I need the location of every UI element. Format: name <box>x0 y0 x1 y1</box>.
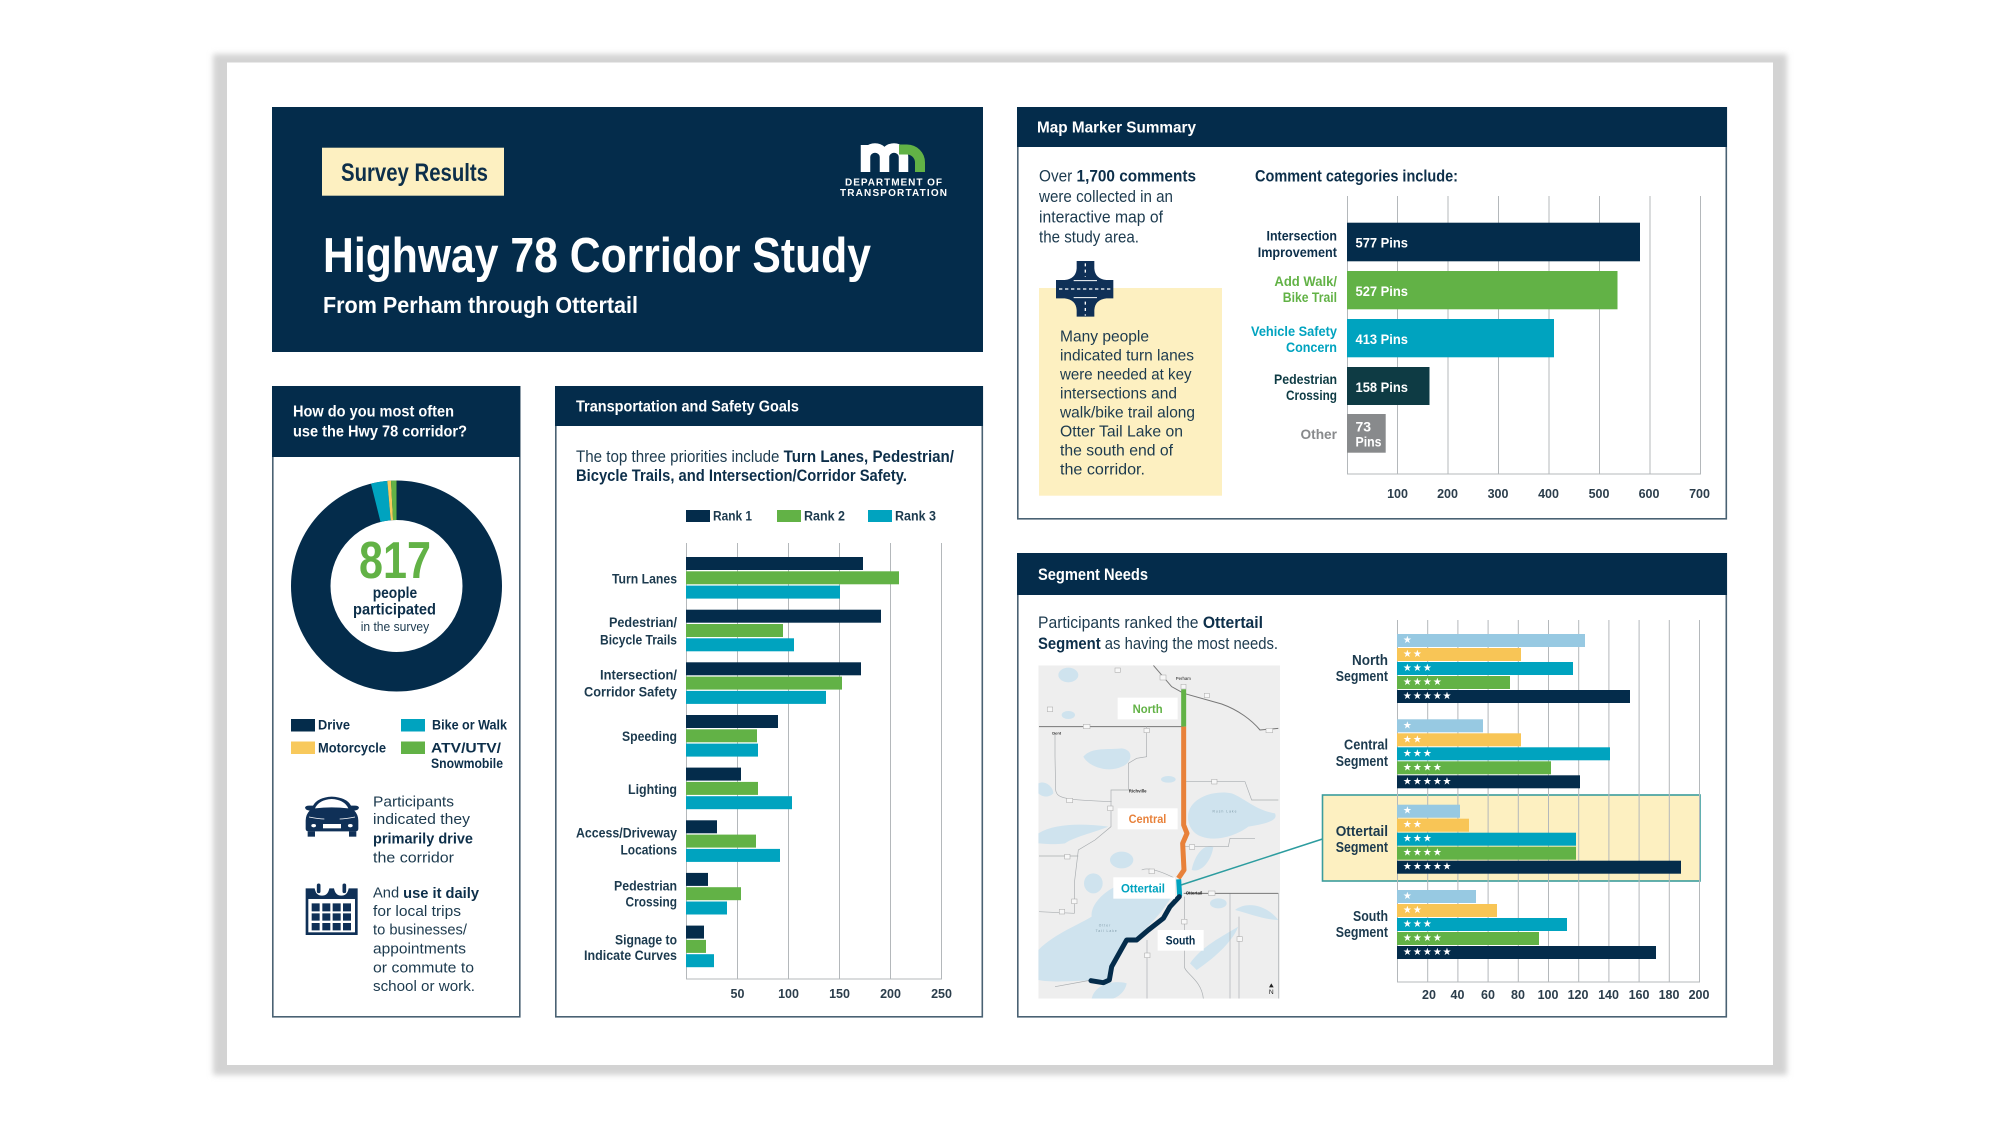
map labels: Rush Lake <box>1213 810 1237 814</box>
donut centre label: people <box>373 585 418 602</box>
intro text: the study area. <box>1039 229 1139 247</box>
panel: title banner <box>272 107 983 352</box>
text: use it daily: for local trips <box>373 903 461 920</box>
star ratings: ★★★ <box>1403 663 1432 674</box>
axis labels: 150 <box>829 987 850 1001</box>
star ratings: ★★ <box>1403 649 1422 660</box>
map labels <box>1052 676 1237 933</box>
intro text <box>1038 614 1278 653</box>
category labels: Crossing <box>626 894 677 910</box>
donut centre label <box>353 532 436 634</box>
star ratings: ★ <box>1403 891 1412 902</box>
chart legend <box>686 508 936 524</box>
panel heading: Segment Needs <box>1038 566 1148 584</box>
map labels: Ottertail <box>1186 890 1202 895</box>
callout text: indicated turn lanes <box>1060 348 1194 364</box>
callout text: the south end of <box>1060 442 1174 460</box>
segment labels <box>1336 653 1388 941</box>
category labels: Pedestrian/ <box>609 615 677 630</box>
bar chart: pins <box>1251 196 1710 501</box>
callout text: intersections and <box>1060 386 1177 402</box>
intro text: Segment as having the most needs. <box>1038 635 1278 653</box>
panel heading: Transportation and Safety Goals <box>576 398 799 416</box>
donut centre label: 817 <box>359 532 431 590</box>
star ratings: ★★★ <box>1403 834 1432 845</box>
chart legend: Rank 1 <box>713 508 752 524</box>
segment map labels <box>1113 698 1204 951</box>
category labels: Vehicle Safety <box>1251 323 1337 339</box>
axis labels: 140 <box>1598 988 1619 1002</box>
map labels: Otter <box>1099 924 1111 928</box>
panel: transportation and safety goals <box>555 386 983 1017</box>
category labels: Crossing <box>1286 387 1337 403</box>
star ratings: ★ <box>1403 720 1412 731</box>
text: use it daily: to businesses/ <box>373 922 468 938</box>
text: primarily drive: the corridor <box>373 850 454 866</box>
text: primarily drive: Participants <box>373 794 454 810</box>
MnDOT logo: DEPARTMENT OF <box>845 178 942 188</box>
category labels: Bike Trail <box>1283 289 1337 305</box>
chart legend: Rank 3 <box>895 508 936 524</box>
panel heading: use the Hwy 78 corridor? <box>293 424 467 440</box>
axis labels: 60 <box>1481 988 1495 1002</box>
bar values <box>1356 235 1408 449</box>
star ratings: ★★★★ <box>1403 933 1442 944</box>
star ratings: ★★★★★ <box>1403 862 1452 873</box>
category labels: Bicycle Trails <box>600 632 677 648</box>
panel: map marker summary <box>1017 107 1727 519</box>
panel: segment needs <box>1017 553 1727 1017</box>
donut chart <box>311 480 482 672</box>
segment map labels: North <box>1133 702 1163 716</box>
star ratings: ★★ <box>1403 820 1422 831</box>
callout text: the corridor. <box>1060 462 1145 478</box>
axis labels: 200 <box>880 987 901 1001</box>
intro text: Participants ranked the Ottertail <box>1038 614 1263 632</box>
segment labels: South <box>1353 909 1388 925</box>
category labels: Access/Driveway <box>576 826 677 840</box>
axis labels: 40 <box>1451 988 1464 1002</box>
corridor route segments <box>1091 689 1187 983</box>
panel heading: Map Marker Summary <box>1037 120 1196 136</box>
survey results badge: Survey Results <box>341 159 488 187</box>
star ratings: ★★★ <box>1403 748 1432 759</box>
axis labels: 200 <box>1437 487 1458 501</box>
corridor map <box>1038 665 1280 999</box>
axis labels: 100 <box>1538 988 1558 1002</box>
callout: turn lanes <box>1039 261 1222 496</box>
category labels: Turn Lanes <box>612 572 677 586</box>
bar values: 413 Pins <box>1356 331 1408 347</box>
text: use it daily: or commute to <box>373 960 474 976</box>
category labels: Concern <box>1286 339 1337 355</box>
donut legend: ATV/UTV/ <box>431 740 501 756</box>
map labels: Tail Lake <box>1096 929 1118 933</box>
donut centre label: participated <box>353 602 436 618</box>
bar values: 158 Pins <box>1356 379 1408 395</box>
text: use it daily: appointments <box>373 940 466 958</box>
category labels: Corridor Safety <box>584 684 677 700</box>
star ratings: ★★★★ <box>1403 848 1442 859</box>
donut centre label: in the survey <box>361 620 430 634</box>
panel heading: How do you most often <box>293 404 454 420</box>
category labels: Intersection <box>1266 228 1337 244</box>
map labels: Richville <box>1129 788 1147 793</box>
axis labels: 600 <box>1639 487 1659 501</box>
star ratings: ★★★★★ <box>1403 947 1452 958</box>
chart legend: Rank 2 <box>804 508 845 524</box>
segment map labels: Ottertail <box>1121 881 1165 895</box>
intro text: interactive map of <box>1039 209 1163 227</box>
north arrow <box>1269 983 1274 996</box>
star ratings: ★ <box>1403 806 1412 817</box>
icon: calendar <box>306 883 358 935</box>
bar chart: segment rankings <box>1336 620 1709 1002</box>
intro text <box>576 448 954 485</box>
donut legend: Snowmobile <box>431 756 503 771</box>
title: Highway 78 Corridor Study <box>323 229 871 283</box>
star ratings <box>1403 635 1452 958</box>
segment labels: Segment <box>1336 840 1388 856</box>
axis labels: 20 <box>1422 988 1436 1002</box>
highlight: Ottertail segment <box>1181 795 1700 885</box>
intro text: Bicycle Trails, and Intersection/Corridor Safety. <box>576 467 907 485</box>
segment map labels: South <box>1166 934 1195 948</box>
category labels: Intersection/ <box>600 668 677 682</box>
category labels <box>576 572 677 963</box>
text: use it daily <box>373 884 480 995</box>
category labels: Pedestrian <box>1274 371 1337 387</box>
star ratings: ★★ <box>1403 905 1422 916</box>
segment labels: Ottertail <box>1336 824 1388 840</box>
donut legend: Bike or Walk <box>432 718 507 732</box>
axis labels: 100 <box>1387 487 1408 501</box>
star ratings: ★★★ <box>1403 919 1432 930</box>
segment labels: Central <box>1344 738 1388 754</box>
category labels: Signage to <box>615 932 677 948</box>
bar values: 577 Pins <box>1356 235 1408 251</box>
axis labels: 700 <box>1689 487 1710 501</box>
text: use it daily: And use it daily <box>373 884 480 902</box>
axis labels: 500 <box>1589 487 1609 501</box>
intro text <box>1038 168 1196 247</box>
category labels: Indicate Curves <box>584 948 677 963</box>
callout text: Otter Tail Lake on <box>1060 424 1183 440</box>
axis labels: 120 <box>1568 988 1588 1002</box>
donut legend: Drive <box>318 718 350 732</box>
axis labels: 100 <box>778 987 799 1001</box>
segment labels: Segment <box>1336 754 1388 770</box>
segment map labels: Central <box>1129 812 1166 826</box>
segment labels: North <box>1352 653 1388 669</box>
text: primarily drive <box>373 794 473 866</box>
chart heading: Comment categories include: <box>1255 168 1458 186</box>
MnDOT logo <box>840 145 947 199</box>
survey results badge <box>322 148 504 196</box>
north arrow: N <box>1269 989 1274 996</box>
axis labels: 180 <box>1659 988 1679 1002</box>
category labels: Pedestrian <box>614 878 677 894</box>
category labels: Locations <box>620 842 677 858</box>
category labels: Lighting <box>628 782 677 797</box>
bar values: Pins <box>1356 433 1382 449</box>
callout text: Many people <box>1060 328 1149 346</box>
donut legend <box>291 718 507 771</box>
bar chart: priorities <box>576 543 952 1001</box>
map labels: Perham <box>1176 676 1191 681</box>
bar values: 73 <box>1356 419 1371 435</box>
axis labels: 50 <box>731 987 744 1001</box>
map labels: Dent <box>1052 730 1062 735</box>
star ratings: ★★ <box>1403 734 1422 745</box>
poster card <box>227 62 1773 1065</box>
icon: intersection <box>1056 261 1113 317</box>
callout text <box>1059 328 1195 478</box>
subtitle: From Perham through Ottertail <box>323 292 638 318</box>
donut legend: Motorcycle <box>318 740 386 756</box>
category labels: Other <box>1300 426 1338 442</box>
bar values: 527 Pins <box>1356 283 1408 299</box>
category labels <box>1251 228 1338 442</box>
segment labels: Segment <box>1336 669 1388 685</box>
axis labels <box>1422 988 1709 1002</box>
star ratings: ★★★★★ <box>1403 776 1452 787</box>
intro text: were collected in an <box>1038 188 1173 206</box>
poster shadow frame <box>213 54 1787 1075</box>
panel: how do you use the corridor <box>272 386 520 1017</box>
axis labels: 80 <box>1511 988 1525 1002</box>
axis labels: 160 <box>1629 988 1649 1002</box>
text: primarily drive: indicated they <box>373 811 471 828</box>
category labels: Improvement <box>1258 244 1337 260</box>
axis labels: 300 <box>1488 487 1508 501</box>
icon: car <box>305 797 359 837</box>
segment labels: Segment <box>1336 925 1388 941</box>
axis labels <box>731 987 952 1001</box>
MnDOT logo: TRANSPORTATION <box>840 188 947 199</box>
text: primarily drive: primarily drive <box>373 830 473 848</box>
text: use it daily: school or work. <box>373 978 475 995</box>
panel heading <box>293 404 467 440</box>
star ratings: ★★★★ <box>1403 762 1442 773</box>
category labels: Speeding <box>622 729 677 744</box>
category labels: Add Walk/ <box>1274 273 1337 289</box>
axis labels: 250 <box>931 987 952 1001</box>
star ratings: ★ <box>1403 635 1412 646</box>
axis labels <box>1387 487 1710 501</box>
star ratings: ★★★★ <box>1403 677 1442 688</box>
intro text: Over 1,700 comments <box>1039 168 1196 186</box>
star ratings: ★★★★★ <box>1403 691 1452 702</box>
callout text: walk/bike trail along <box>1059 404 1195 422</box>
axis labels: 400 <box>1538 487 1559 501</box>
callout text: were needed at key <box>1059 366 1192 384</box>
intro text: The top three priorities include Turn Lanes, Pedestrian/ <box>576 448 954 466</box>
axis labels: 200 <box>1689 988 1709 1002</box>
